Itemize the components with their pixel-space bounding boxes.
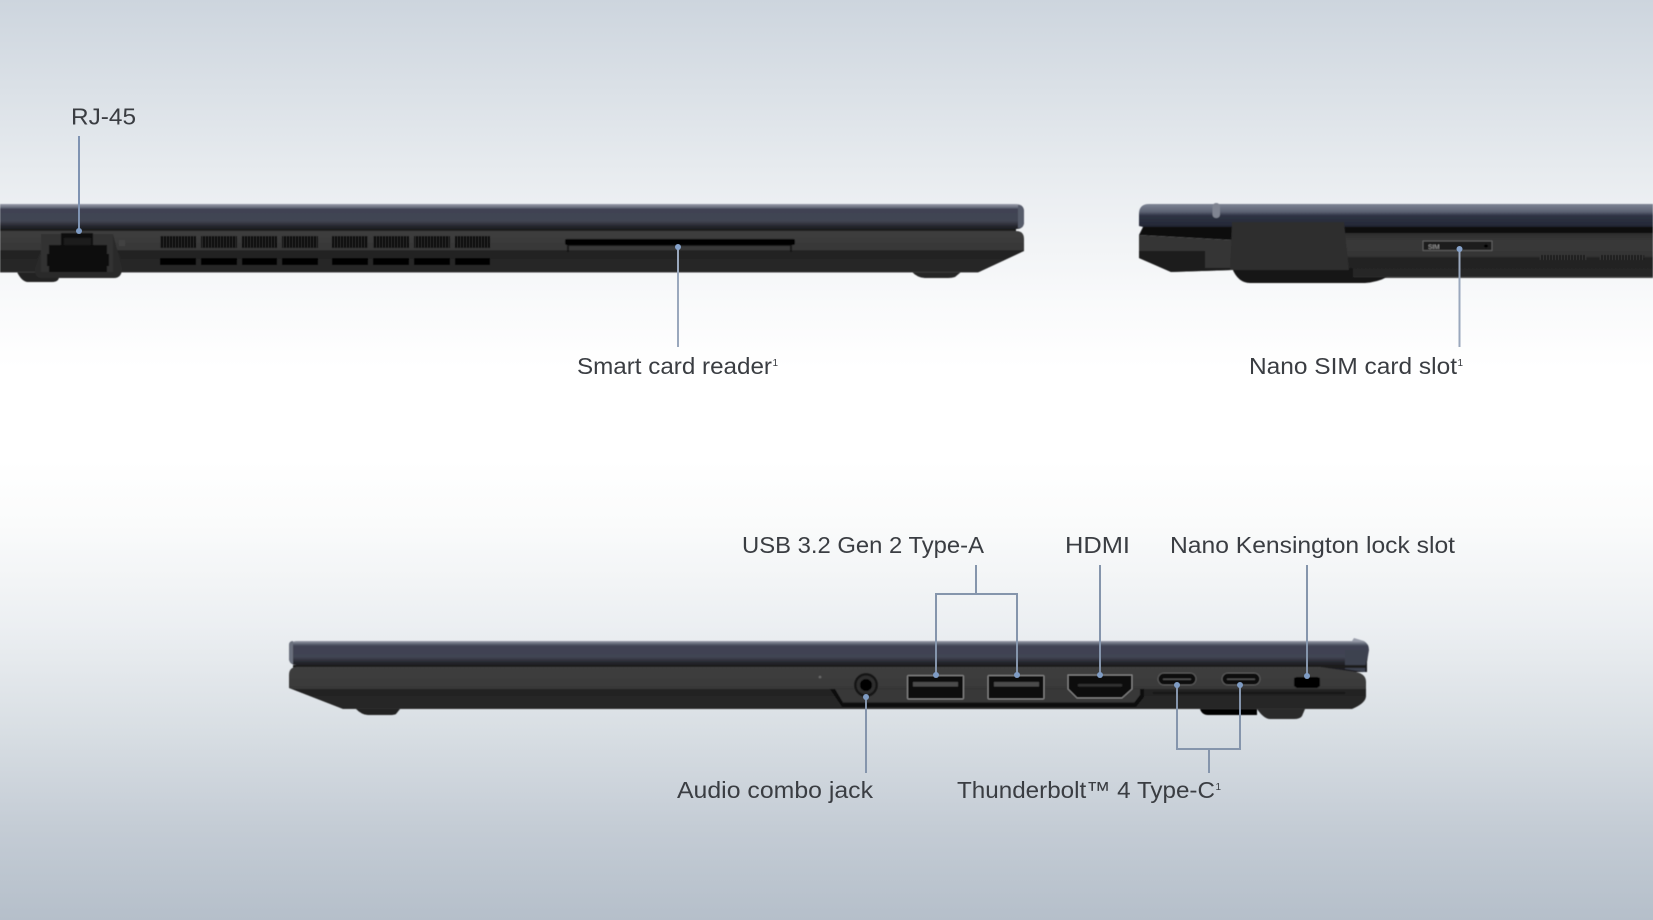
laptop: bottom view with ports [289, 638, 1369, 719]
icon: HDMI port [1068, 675, 1132, 698]
label: USB: USB 3.2 Gen 2 Type-A [742, 532, 984, 558]
label: HDMI: HDMI [1065, 532, 1130, 558]
port tray [835, 689, 1140, 702]
icon: USB Type-A port 1 [908, 676, 964, 699]
leader: HDMI [1097, 565, 1103, 678]
icon: Thunderbolt port 2 [1222, 673, 1260, 685]
SIM slot [1423, 241, 1492, 251]
icon: network glyph [119, 240, 125, 246]
label: smart card reader: Smart card reader [577, 353, 772, 379]
SIM slot: SIM [1428, 244, 1440, 251]
icon: Thunderbolt port 1 [1158, 673, 1196, 685]
icon: Kensington lock slot [1294, 677, 1320, 688]
power knob [1212, 203, 1220, 218]
label: RJ-45: RJ-45 [71, 104, 136, 130]
label: smart card reader: 1 [772, 358, 778, 369]
icon: RJ-45 port [35, 233, 122, 278]
leader: smart card reader [675, 244, 681, 347]
vents [160, 236, 490, 265]
label: Kensington: Nano Kensington lock slot [1170, 532, 1455, 558]
label: nano SIM card slot: Nano SIM card slot [1249, 353, 1457, 379]
leader: Kensington [1304, 565, 1310, 679]
label: Thunderbolt: 1 [1216, 782, 1222, 793]
vents small [1540, 255, 1644, 260]
leader: audio jack [863, 694, 869, 773]
leader: RJ-45 [76, 136, 82, 234]
icon: audio combo jack [854, 673, 878, 697]
laptop: left side view [0, 204, 1024, 282]
hinge [1230, 222, 1349, 270]
leader: Thunderbolt bracket [1174, 682, 1243, 773]
icon: USB Type-A port 2 [988, 676, 1044, 699]
smart card slot [565, 239, 795, 252]
label: audio combo jack: Audio combo jack [677, 777, 873, 803]
leader: USB bracket [933, 565, 1020, 678]
icon: status LED [819, 676, 821, 678]
laptop: right side view [1139, 203, 1653, 283]
label: nano SIM card slot: 1 [1458, 358, 1464, 369]
base seam [1153, 692, 1345, 694]
label: Thunderbolt: Thunderbolt™ 4 Type-C [957, 777, 1215, 803]
leader: nano SIM [1456, 246, 1462, 347]
